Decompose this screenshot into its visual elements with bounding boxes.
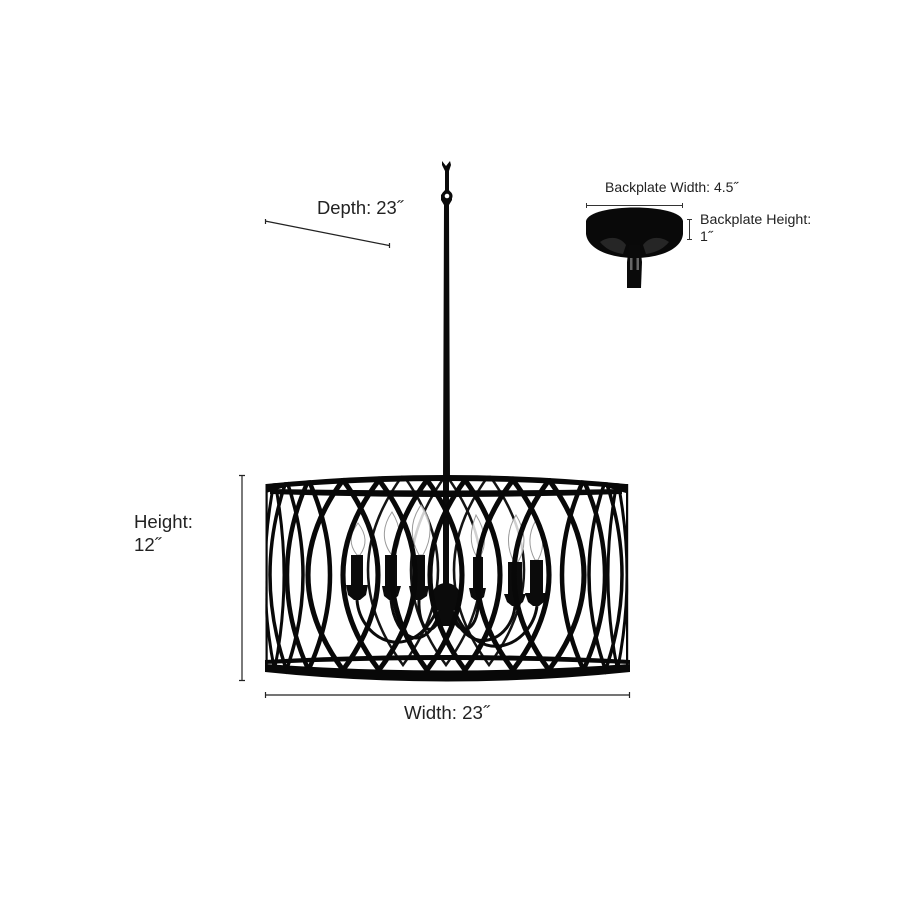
dimension: backplate height (687, 212, 811, 245)
front lattice (265, 480, 627, 670)
back lattice (368, 475, 524, 665)
dimension: depth (265, 197, 405, 248)
dimension: depth: Depth: 23˝ (317, 197, 405, 218)
dimension: height: 12˝ (134, 534, 163, 555)
chandelier (265, 161, 630, 682)
backplate (586, 208, 683, 288)
dimension: backplate height: Backplate Height: (700, 212, 811, 228)
chain (627, 245, 642, 288)
candles and bulbs (346, 505, 546, 606)
bottom rim (265, 655, 630, 682)
dimension: width (265, 692, 630, 723)
dimension: height: Height: (134, 511, 193, 532)
hanging rod and hook (441, 161, 452, 480)
dimension: backplate height: 1˝ (700, 229, 714, 245)
dimension: backplate width (586, 179, 739, 208)
arms and central body (357, 480, 537, 646)
canopy body (586, 208, 683, 258)
top rim (266, 475, 628, 672)
dimension: backplate width: Backplate Width: 4.5˝ (605, 179, 739, 195)
dimension: width: Width: 23˝ (404, 702, 491, 723)
dimension: height (134, 475, 245, 681)
